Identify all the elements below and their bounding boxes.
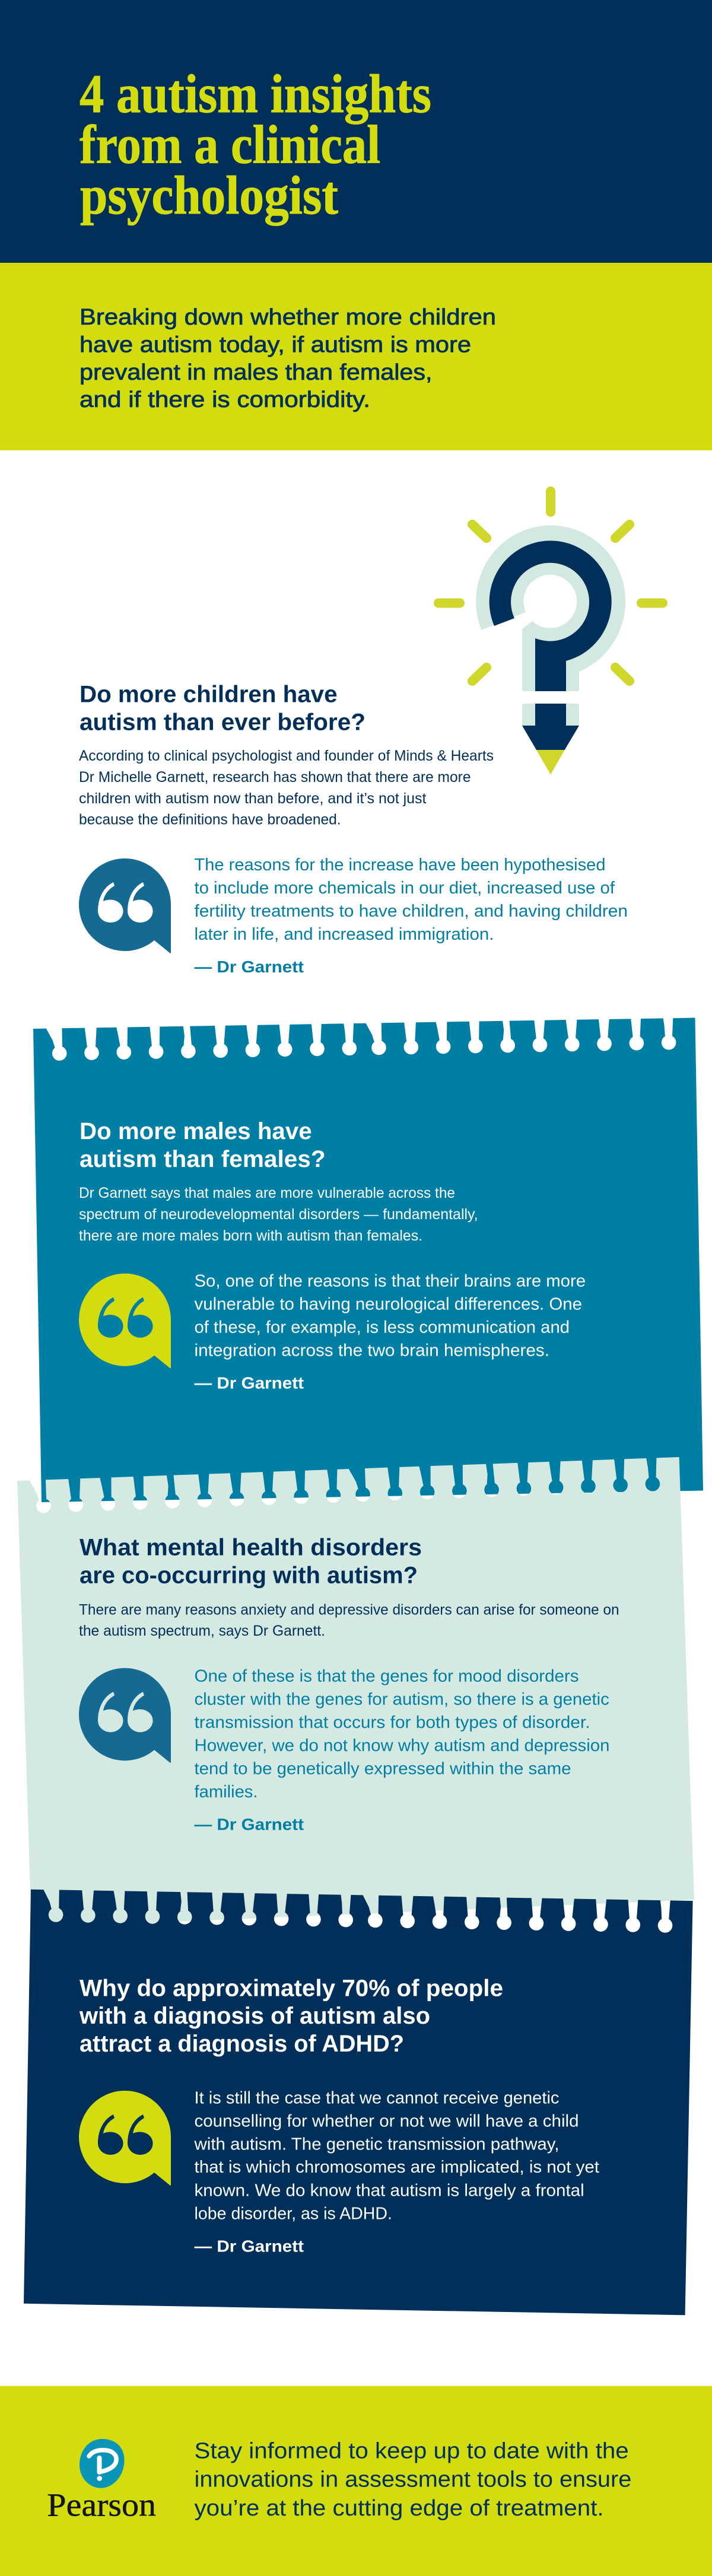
body text: because the definitions have broadened. bbox=[79, 812, 341, 828]
footer text bbox=[195, 2438, 631, 2521]
heading: Why do approximately 70% of people bbox=[80, 1975, 503, 2001]
footer text: innovations in assessment tools to ensure bbox=[195, 2467, 631, 2492]
body text: the autism spectrum, says Dr Garnett. bbox=[79, 1623, 325, 1639]
intro text: have autism today, if autism is more bbox=[80, 332, 471, 357]
heading bbox=[80, 681, 365, 736]
quote text: with autism. The genetic transmission pathway, bbox=[193, 2135, 559, 2154]
body text bbox=[79, 748, 494, 828]
quote text: to include more chemicals in our diet, increased use of bbox=[195, 879, 615, 898]
icon: pencil body bbox=[522, 704, 579, 775]
quote text: fertility treatments to have children, and having children bbox=[195, 902, 628, 921]
body text bbox=[79, 1185, 478, 1244]
body text: children with autism now than before, and it’s not just bbox=[79, 790, 427, 807]
heading: autism than ever before? bbox=[80, 710, 365, 736]
footer panel bbox=[0, 2386, 712, 2576]
icon: quote bubble bbox=[79, 1668, 171, 1763]
quote attribution: — Dr Garnett bbox=[195, 1374, 304, 1392]
quote text: known. We do know that autism is largely a frontal bbox=[195, 2181, 584, 2200]
quote attribution: — Dr Garnett bbox=[195, 958, 304, 976]
heading: What mental health disorders bbox=[80, 1535, 422, 1561]
quote attribution: — Dr Garnett bbox=[195, 2237, 304, 2255]
icon: quote bubble bbox=[79, 858, 171, 953]
intro text: and if there is comorbidity. bbox=[80, 387, 370, 412]
title bbox=[80, 63, 431, 225]
title: psychologist bbox=[80, 165, 338, 225]
quote text: lobe disorder, as is ADHD. bbox=[195, 2204, 392, 2223]
quote text: cluster with the genes for autism, so there is a genetic bbox=[195, 1690, 609, 1709]
body text: According to clinical psychologist and founder of Minds & Hearts bbox=[79, 748, 494, 764]
heading: attract a diagnosis of ADHD? bbox=[80, 2031, 404, 2057]
header panel bbox=[0, 0, 712, 263]
section 1: do more children have autism bbox=[79, 681, 628, 976]
quote text: later in life, and increased immigration. bbox=[195, 925, 494, 944]
panel: autism and ADHD bbox=[24, 1890, 693, 2315]
quote text: It is still the case that we cannot receive genetic bbox=[195, 2088, 559, 2107]
intro text: prevalent in males than females, bbox=[80, 360, 432, 385]
heading bbox=[80, 1118, 326, 1172]
title: from a clinical bbox=[80, 114, 380, 174]
icon: question mark outline bbox=[476, 526, 625, 691]
heading bbox=[79, 1975, 503, 2057]
quote text: So, one of the reasons is that their brains are more bbox=[195, 1271, 586, 1290]
torn paper background bbox=[17, 1457, 694, 1928]
title: 4 autism insights bbox=[80, 63, 431, 124]
heading bbox=[80, 1535, 422, 1589]
panel: do more males have autism bbox=[33, 1018, 703, 1502]
body text: spectrum of neurodevelopmental disorders — fundamentally, bbox=[79, 1206, 478, 1223]
panel: mental health disorders co-occurring with autism bbox=[17, 1457, 694, 1928]
icon: question mark core bbox=[490, 540, 612, 691]
quote text bbox=[195, 856, 628, 944]
heading: Do more males have bbox=[80, 1118, 312, 1144]
icon: light rays bbox=[438, 491, 663, 681]
quote text: tend to be genetically expressed within the same bbox=[195, 1760, 571, 1779]
intro panel bbox=[0, 263, 712, 450]
quote text: of these, for example, is less communication and bbox=[195, 1318, 570, 1337]
quote text: that is which chromosomes are implicated, is not yet bbox=[195, 2158, 599, 2177]
intro text bbox=[80, 305, 496, 412]
body text: Dr Michelle Garnett, research has shown that there are more bbox=[79, 769, 471, 785]
icon: question mark light bulb pencil bbox=[438, 491, 663, 775]
heading: Do more children have bbox=[80, 681, 337, 707]
quote attribution: — Dr Garnett bbox=[195, 1815, 304, 1833]
quote text: vulnerable to having neurological differences. One bbox=[195, 1295, 582, 1314]
heading: autism than females? bbox=[80, 1146, 326, 1172]
body text: There are many reasons anxiety and depressive disorders can arise for someone on bbox=[79, 1602, 619, 1618]
quote text bbox=[193, 2088, 599, 2223]
body text: Dr Garnett says that males are more vulnerable across the bbox=[79, 1185, 455, 1201]
intro text: Breaking down whether more children bbox=[80, 305, 496, 330]
footer text: you’re at the cutting edge of treatment. bbox=[195, 2496, 604, 2521]
icon: Pearson blob bbox=[80, 2439, 125, 2488]
quote text: The reasons for the increase have been hypothesised bbox=[195, 856, 605, 874]
quote text bbox=[195, 1667, 610, 1802]
quote text: integration across the two brain hemispheres. bbox=[195, 1341, 549, 1360]
quote text: One of these is that the genes for mood disorders bbox=[195, 1667, 579, 1686]
heading: with a diagnosis of autism also bbox=[79, 2003, 430, 2029]
heading: are co-occurring with autism? bbox=[80, 1563, 418, 1589]
icon: quote bubble bbox=[79, 1274, 171, 1368]
torn paper background bbox=[24, 1890, 693, 2315]
body text: there are more males born with autism than females. bbox=[79, 1227, 422, 1244]
footer text: Stay informed to keep up to date with the bbox=[195, 2438, 629, 2463]
icon: quote bubble bbox=[79, 2091, 171, 2186]
Pearson wordmark: Pearson bbox=[47, 2487, 156, 2523]
quote text: counselling for whether or not we will have a child bbox=[195, 2112, 579, 2131]
quote text bbox=[195, 1271, 586, 1360]
body text bbox=[79, 1602, 619, 1639]
quote text: families. bbox=[195, 1783, 258, 1802]
quote text: transmission that occurs for both types of disorder. bbox=[195, 1713, 590, 1732]
Pearson logo bbox=[47, 2439, 156, 2523]
torn paper background bbox=[33, 1018, 703, 1502]
quote text: However, we do not know why autism and depression bbox=[195, 1737, 610, 1756]
